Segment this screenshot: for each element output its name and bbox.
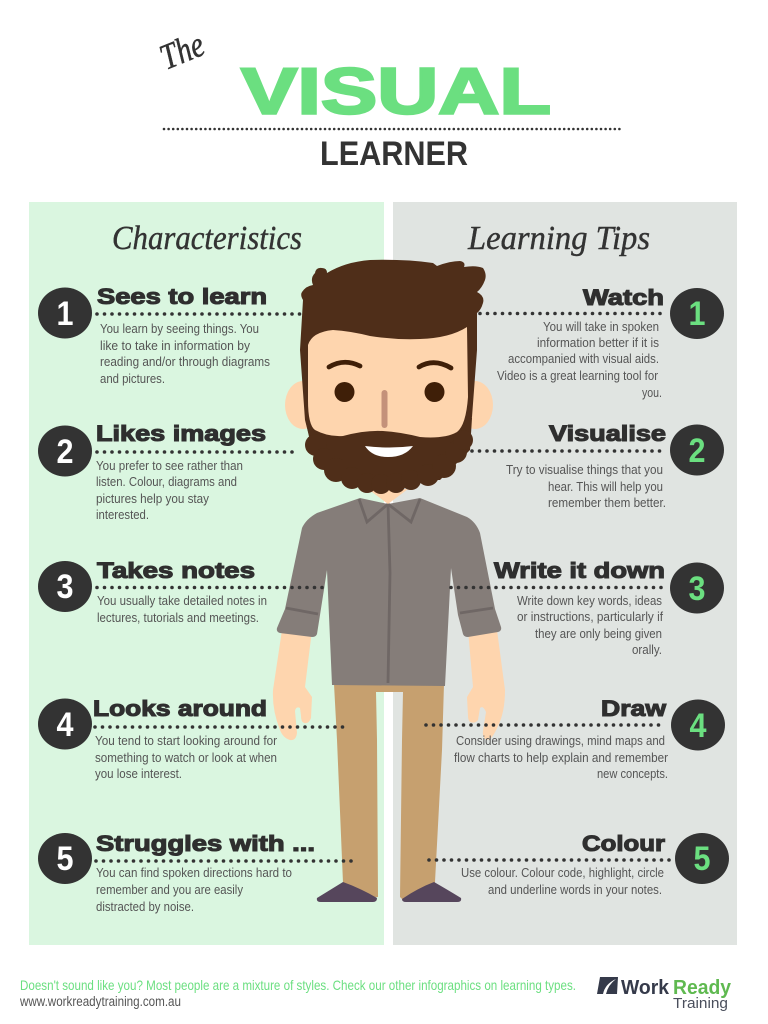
characteristic 4: 4: [56, 706, 74, 744]
tip 5: Use colour. Colour code, highlight, circle: [461, 865, 664, 880]
characteristic 3: You usually take detailed notes in: [97, 593, 267, 608]
title: [154, 24, 621, 173]
characteristic 2: You prefer to see rather than: [96, 458, 243, 473]
tip 1: Watch: [583, 285, 664, 310]
illustration: bearded man: [273, 260, 505, 902]
characteristic 2: pictures help you stay: [96, 491, 209, 506]
tip 5: and underline words in your notes.: [488, 882, 662, 897]
tip 3: they are only being given: [535, 626, 662, 641]
characteristic 5: 5: [56, 840, 74, 878]
characteristic 5: You can find spoken directions hard to: [96, 865, 292, 880]
tip 4: Draw: [601, 696, 667, 721]
characteristic 1: Sees to learn: [97, 284, 267, 309]
icon: logo mark: [597, 977, 618, 994]
characteristic 3: lectures, tutorials and meetings.: [97, 610, 259, 625]
hair and beard: [300, 260, 486, 494]
characteristic 1: and pictures.: [100, 371, 165, 386]
shirt: [277, 498, 501, 686]
face: [308, 327, 468, 437]
characteristic 1: [38, 284, 303, 386]
characteristic 1: 1: [56, 295, 74, 333]
title: VISUAL: [241, 54, 551, 128]
tip 1: information better if it is: [537, 335, 659, 350]
title: The: [154, 24, 210, 77]
characteristic 2: listen. Colour, diagrams and: [96, 474, 237, 489]
characteristic 1: reading and/or through diagrams: [100, 354, 270, 369]
tip 4: Consider using drawings, mind maps and: [456, 733, 665, 748]
characteristic 4: something to watch or look at when: [95, 750, 277, 765]
characteristic 2: 2: [56, 433, 74, 471]
tip 4: flow charts to help explain and remember: [454, 750, 669, 765]
tip 3: 3: [688, 570, 706, 608]
tip 3: orally.: [632, 642, 662, 657]
neck: [368, 489, 408, 504]
characteristic 4: [38, 696, 345, 781]
smile: [365, 446, 413, 457]
tip 2: hear. This will help you: [548, 479, 663, 494]
tip 2: Try to visualise things that you: [506, 462, 663, 477]
pants: [334, 684, 444, 899]
characteristic 2: Likes images: [96, 421, 266, 446]
panel: characteristics background: [29, 202, 384, 945]
footer note: Doesn't sound like you? Most people are a mixture of styles. Check our other infographics on learning types.: [20, 977, 576, 993]
characteristic 4: You tend to start looking around for: [95, 733, 278, 748]
characteristic 3: [38, 558, 325, 625]
characteristic 4: you lose interest.: [95, 766, 182, 781]
tip 5: [429, 831, 729, 897]
tip 3: Write down key words, ideas: [517, 593, 662, 608]
tip 3: [451, 558, 724, 657]
tip 3: or instructions, particularly if: [517, 609, 663, 624]
characteristic 4: Looks around: [93, 696, 267, 721]
logo: work ready training: [597, 977, 732, 1012]
logo: work ready training: Training: [673, 996, 728, 1012]
tip 4: [426, 696, 725, 781]
tip 2: remember them better.: [548, 495, 666, 510]
tip 1: accompanied with visual aids.: [508, 351, 659, 366]
tip 1: You will take in spoken: [543, 319, 659, 334]
tip 2: Visualise: [549, 421, 666, 446]
tip 5: Colour: [582, 831, 665, 856]
characteristic 3: Takes notes: [97, 558, 255, 583]
footer url: www.workreadytraining.com.au: [19, 994, 181, 1009]
eyes: [334, 382, 354, 402]
tip 1: 1: [688, 295, 706, 333]
heading: learning tips: Learning Tips: [467, 220, 650, 257]
tip 1: [480, 285, 724, 400]
logo: work ready training: Ready: [673, 977, 732, 999]
characteristic 5: remember and you are easily: [96, 882, 243, 897]
arms and hands: [273, 630, 505, 740]
ears: [285, 381, 321, 429]
tip 2: 2: [688, 432, 706, 470]
characteristic 2: interested.: [96, 507, 149, 522]
tip 1: Video is a great learning tool for: [497, 368, 659, 383]
characteristic 5: Struggles with ...: [96, 831, 315, 856]
tip 4: 4: [690, 707, 707, 745]
characteristic 1: You learn by seeing things. You: [100, 321, 259, 336]
tip 3: Write it down: [494, 558, 665, 583]
logo: work ready training: Work: [621, 977, 670, 999]
tip 4: new concepts.: [597, 766, 668, 781]
eyebrows: [329, 362, 451, 368]
characteristic 5: [38, 831, 355, 914]
title: LEARNER: [320, 135, 468, 173]
panel: learning tips background: [393, 202, 737, 945]
nose: [382, 393, 388, 425]
tip 5: 5: [694, 840, 710, 878]
heading: characteristics: Characteristics: [112, 220, 302, 257]
shoes: [317, 882, 461, 902]
characteristic 1: like to take in information by: [100, 338, 250, 353]
characteristic 2: [38, 421, 295, 522]
characteristic 5: distracted by noise.: [96, 899, 194, 914]
shirt details: [286, 499, 493, 683]
tip 1: you.: [642, 385, 662, 400]
tip 2: [472, 421, 724, 510]
characteristic 3: 3: [56, 568, 74, 606]
